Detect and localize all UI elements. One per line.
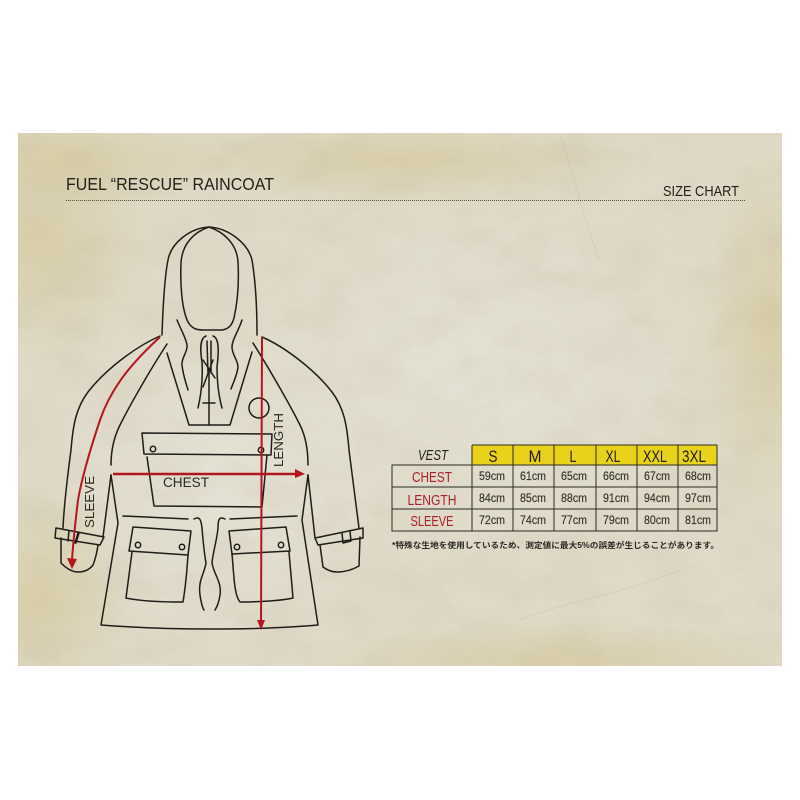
row: length: 97cm [685,493,711,505]
lower left pocket [126,527,191,602]
waist drawcord [123,516,297,610]
row: length: 88cm [561,493,587,505]
row: sleeve: 81cm [685,515,711,527]
table header: M [528,447,542,466]
left sleeve [55,336,167,572]
table header: VEST [418,447,449,464]
row: chest: CHEST [412,469,452,486]
arrow: chest [113,469,305,478]
label: chest: CHEST [163,475,209,490]
table header: S [488,447,498,466]
table header: L [570,447,576,466]
title: FUEL “RESCUE” RAINCOAT [66,174,274,194]
row: chest: 67cm [644,471,670,483]
row: chest: 61cm [520,471,546,483]
row: chest: 59cm [479,471,505,483]
row: sleeve: 80cm [644,515,670,527]
row: length: 84cm [479,493,505,505]
row: sleeve: 74cm [520,515,546,527]
row: sleeve [410,513,711,530]
arrow: length [257,337,265,630]
bib and zipper [167,320,252,425]
raincoat diagram [55,227,363,630]
subtitle: size chart: SIZE CHART [663,184,739,200]
size table [392,445,717,531]
label: length: LENGTH [271,413,286,467]
row: length: 91cm [603,493,629,505]
paper background [18,133,782,666]
row: length: 94cm [644,493,670,505]
row: chest: 65cm [561,471,587,483]
row: chest [412,469,711,486]
row: sleeve: 77cm [561,515,587,527]
table grid [392,465,717,531]
table header [418,445,717,466]
row: length [408,492,711,509]
row: length: LENGTH [408,492,456,509]
row: chest: 66cm [603,471,629,483]
row: sleeve: 72cm [479,515,505,527]
table header: 3XL [682,447,706,466]
patch circle [249,398,269,418]
row: sleeve: SLEEVE [410,513,454,530]
table header: XXL [643,447,667,466]
row: length: 85cm [520,493,546,505]
hood [162,227,257,335]
chest pocket [142,433,272,507]
body outline [101,475,318,629]
footnote: *特殊な生地を使用しているため、測定値に最大5%の誤差が生じることがあります。 [392,540,719,550]
right sleeve [253,337,363,572]
lower right pocket [229,527,293,602]
table header: XL [606,447,620,466]
row: chest: 68cm [685,471,711,483]
arrow: sleeve [67,337,160,569]
row: sleeve: 79cm [603,515,629,527]
label: sleeve: SLEEVE [82,476,97,528]
